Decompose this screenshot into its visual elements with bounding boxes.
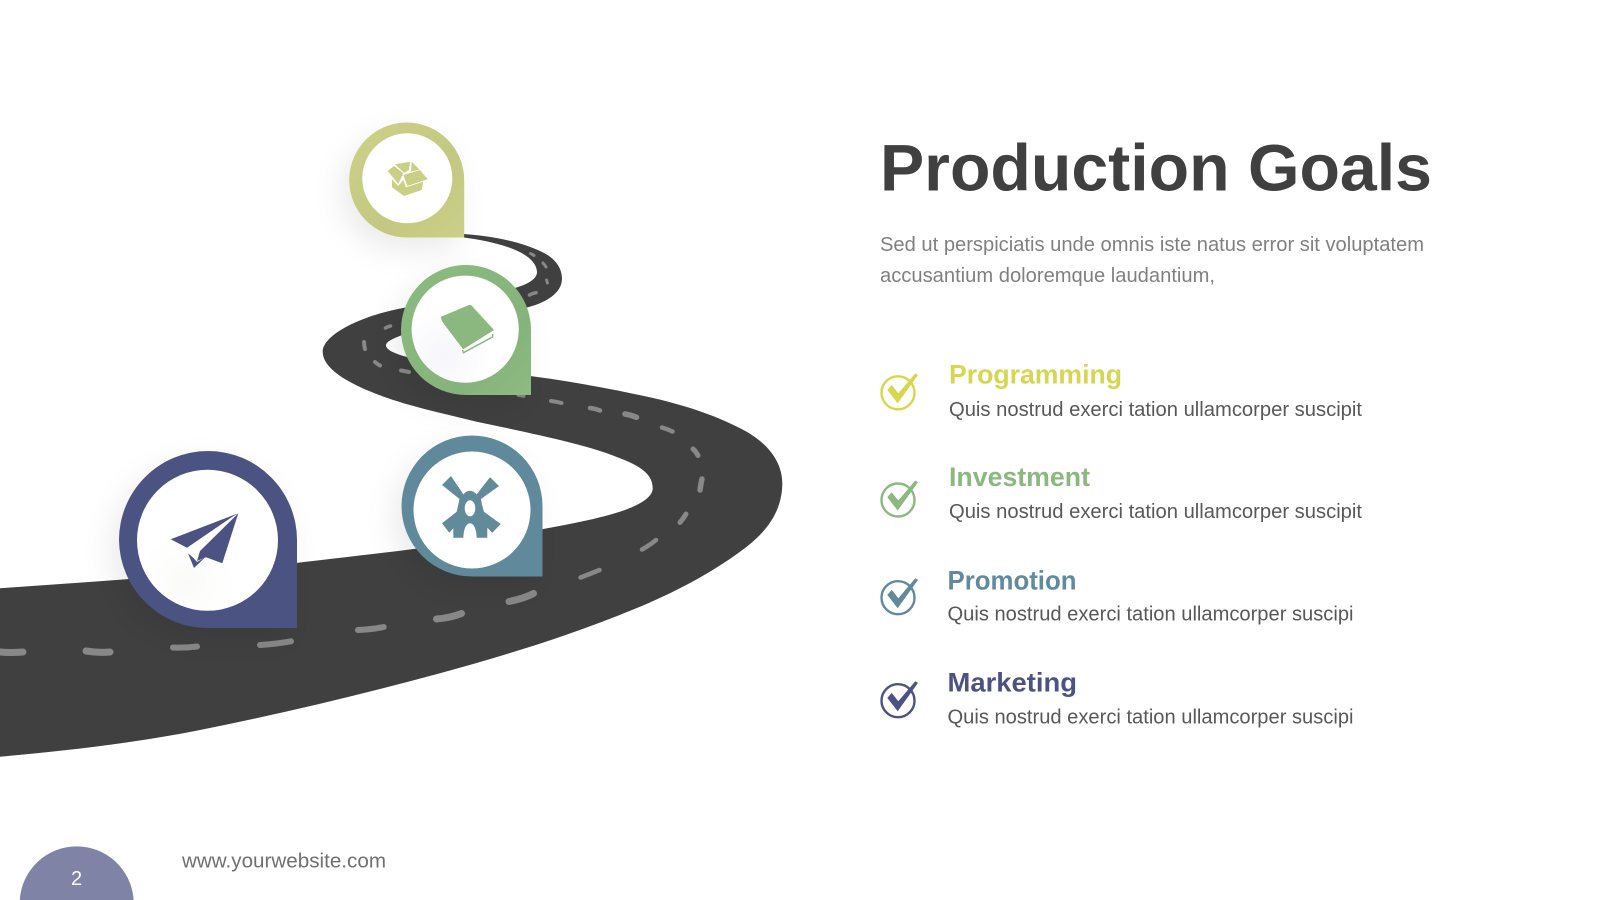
icon: open box: [388, 162, 428, 196]
goal: Marketing: Marketing: [948, 668, 1077, 698]
icon: book: [441, 305, 494, 353]
intro paragraph: Sed ut perspiciatis unde omnis iste natus error sit voluptatem: [880, 234, 1424, 256]
intro paragraph: [880, 234, 1424, 287]
intro paragraph: accusantium doloremque laudantium,: [880, 265, 1215, 287]
website url: www.yourwebsite.com: [181, 851, 386, 873]
icon: blue check: [882, 681, 918, 717]
title: Production Goals: [880, 130, 1432, 204]
icon: windmill: [442, 476, 501, 538]
goal: Investment: [882, 462, 1362, 523]
goal: Programming: Quis nostrud exerci tation ullamcorper suscipit: [949, 399, 1362, 421]
icon: teal check: [882, 578, 918, 614]
page number badge: 2: [71, 868, 82, 890]
goal: Marketing: [882, 668, 1354, 728]
goal: Promotion: Quis nostrud exerci tation ullamcorper suscipi: [948, 604, 1354, 626]
pin: green book: [401, 265, 531, 395]
goal: Programming: Programming: [949, 360, 1122, 390]
road centre dashes: [0, 254, 702, 652]
goal: Investment: Investment: [949, 462, 1090, 492]
goal: Programming: [882, 360, 1362, 421]
goal: Promotion: [882, 565, 1354, 626]
icon: green check: [882, 480, 918, 516]
icon: yellow check: [882, 373, 918, 409]
page number badge: [20, 846, 134, 900]
goal: Investment: Quis nostrud exerci tation ullamcorper suscipit: [949, 501, 1362, 523]
pin: yellow box: [349, 123, 464, 238]
road: [0, 234, 782, 757]
goal: Marketing: Quis nostrud exerci tation ullamcorper suscipi: [948, 706, 1354, 728]
goal: Promotion: Promotion: [948, 565, 1076, 595]
icon: paper plane: [171, 513, 238, 568]
pin: teal windmill: [402, 436, 542, 576]
pin: blue paper plane: [119, 451, 297, 628]
